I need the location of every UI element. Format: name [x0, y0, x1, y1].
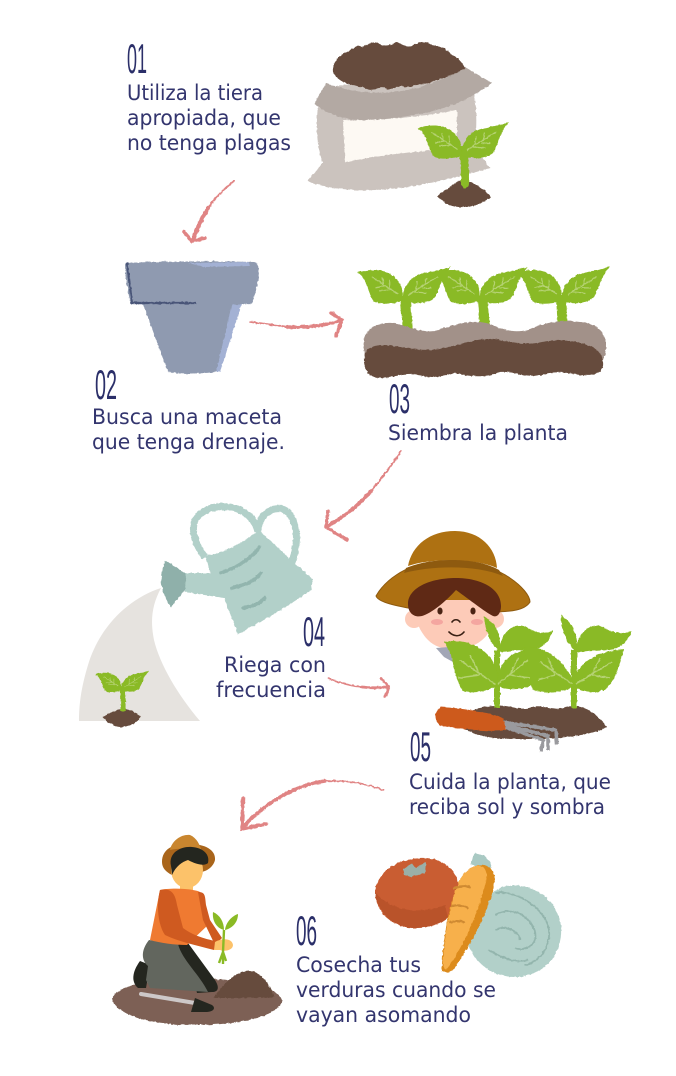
step 06 text: vayan asomando [296, 1003, 471, 1027]
step 04 text: frecuencia [216, 678, 326, 702]
hair [171, 847, 208, 875]
stems [497, 650, 574, 708]
arrow: 03 to 04 [326, 451, 401, 540]
text: 04 [303, 608, 325, 655]
handles [193, 507, 258, 557]
illustration: bean plants with ground and hand fork [436, 615, 632, 752]
illustration: soil sack with sprout [307, 42, 492, 190]
arrow: 05 to 06 [242, 781, 383, 829]
spout rose [161, 560, 186, 607]
tomato [375, 858, 460, 928]
collar [436, 647, 453, 662]
hat band [404, 560, 503, 576]
step 03 text: Siembra la planta [388, 421, 568, 445]
dark back leg [176, 943, 218, 993]
arrow: 01 to 02 [184, 181, 234, 241]
text: 03 [389, 375, 410, 422]
fork handle [436, 707, 506, 731]
arrow: 02 to 03 [250, 313, 342, 336]
stripes [221, 547, 265, 608]
soil heap [333, 42, 465, 90]
lower leaves [444, 641, 497, 692]
illustration: vegetables [375, 853, 561, 977]
stems [405, 295, 563, 332]
trowel [141, 994, 195, 1003]
hat crown [408, 531, 497, 568]
illustration: flowerpot [125, 261, 259, 374]
text: 01 [127, 35, 147, 82]
illustration: child farmer [376, 531, 530, 662]
carrot top [470, 853, 492, 868]
eyes [437, 608, 443, 614]
hair [408, 578, 501, 616]
grey soil layer [364, 321, 606, 372]
step 05 text: reciba sol y sombra [409, 795, 605, 819]
trousers [143, 940, 208, 992]
illustration: watering can [161, 507, 313, 634]
ears [405, 610, 423, 628]
leaf veins [458, 655, 612, 684]
body [185, 530, 313, 634]
dark soil layer [364, 339, 603, 378]
arrow: 04 to 05 [328, 678, 389, 697]
illustration: water stream [79, 588, 200, 721]
step 01 text: Utiliza la tiera [127, 81, 263, 105]
sack body [307, 92, 490, 190]
plant in hand [213, 912, 238, 930]
step 01 text: no tenga plagas [127, 131, 291, 155]
ground [455, 706, 607, 739]
step 04 text: Riega con [224, 653, 326, 677]
text: 02 [95, 361, 117, 408]
sack label [343, 110, 457, 162]
nose and mouth [449, 620, 464, 636]
step 06 text: verduras cuando se [296, 978, 496, 1002]
step 06 text: Cosecha tus [296, 953, 421, 977]
hat [162, 844, 215, 875]
step 05 text: Cuida la planta, que [409, 770, 611, 794]
illustration: gardener kneeling [112, 835, 282, 1025]
sack folded band [314, 67, 492, 120]
upper leaves [484, 616, 500, 652]
illustration: small sprout [95, 671, 149, 727]
carrot [442, 865, 495, 972]
step 02 text: que tenga drenaje. [92, 430, 285, 454]
text: 05 [410, 723, 431, 770]
leaves [357, 266, 451, 304]
fork prongs [502, 722, 557, 752]
text: 06 [296, 907, 317, 954]
sleeves [158, 890, 222, 950]
face [171, 852, 203, 888]
sprout on mound [417, 122, 509, 207]
sack neck [325, 64, 470, 108]
soil patch [112, 979, 282, 1025]
step 02 text: Busca una maceta [92, 405, 282, 429]
mound [214, 971, 274, 998]
hands [214, 939, 233, 951]
tomato calyx [403, 862, 426, 877]
step 01 text: apropiada, que [127, 106, 281, 130]
cabbage [468, 886, 561, 977]
boot [133, 961, 150, 988]
cheeks [431, 619, 443, 625]
hat brim [376, 561, 530, 612]
neck [180, 878, 193, 892]
shirt [150, 889, 208, 945]
face [415, 600, 497, 649]
illustration: three sprouts in soil [357, 266, 610, 378]
